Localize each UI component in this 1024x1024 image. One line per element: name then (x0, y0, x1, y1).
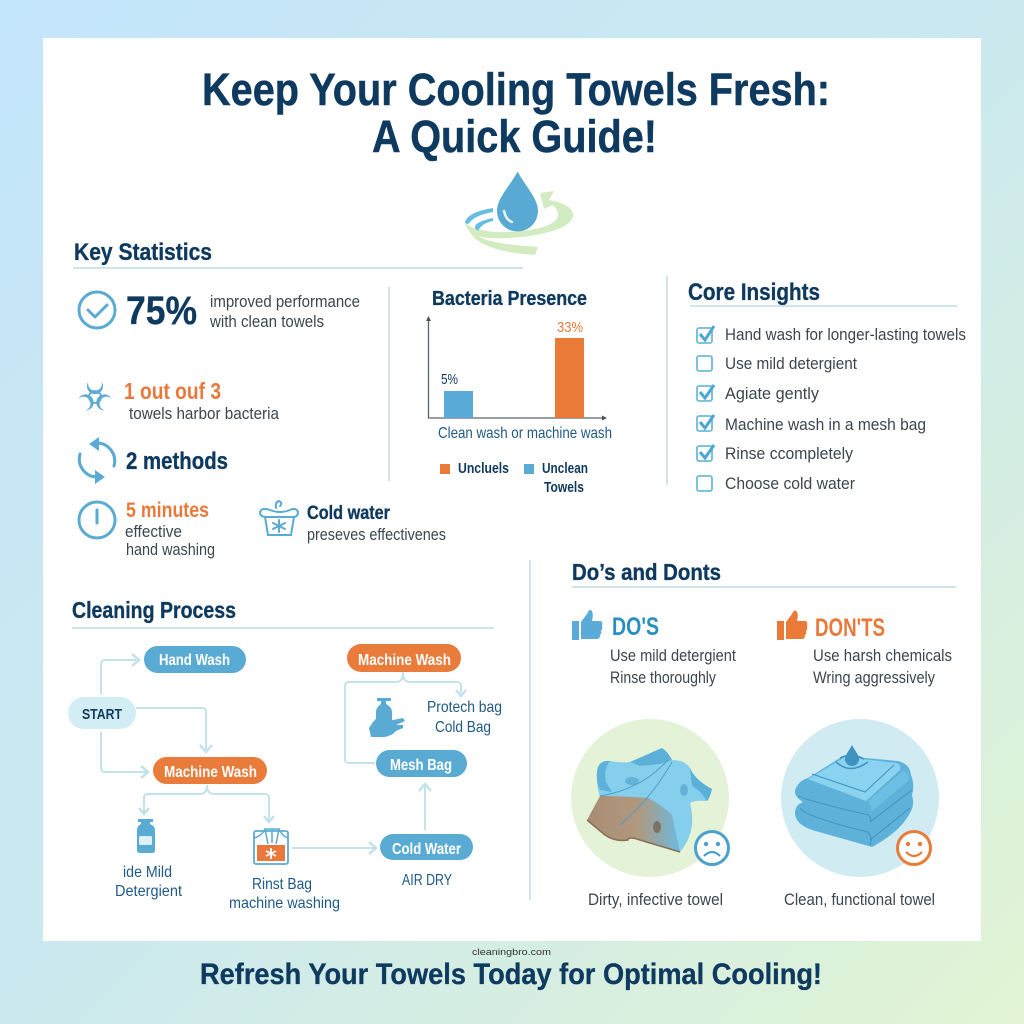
panel: don'ts: Wring aggressively (813, 668, 935, 687)
bar: unclean: 33% (557, 319, 583, 336)
icon: smiley face (898, 832, 930, 864)
panel: do's (572, 610, 736, 687)
stat: cold water: Cold water (307, 503, 391, 524)
stat: cold water: preseves effectivenes (307, 526, 446, 544)
stat: 75 percent: 75% (126, 289, 197, 333)
text: protect bag cold bag: Protech bag (427, 699, 502, 716)
checklist item: Agiate gently (725, 384, 819, 403)
stat: 75 percent (79, 289, 360, 333)
node: hand wash: Hand Wash (159, 652, 230, 669)
title: Keep Your Cooling Towels Fresh: (202, 64, 830, 115)
node: cold water: Cold Water (392, 841, 461, 858)
panel: do's: Rinse thoroughly (610, 668, 716, 687)
footer tagline: Refresh Your Towels Today for Optimal Cooling! (200, 958, 822, 991)
stat: 5 minutes (79, 499, 215, 559)
stat: 2 methods: 2 methods (126, 448, 228, 475)
illustration: clean towel: Clean, functional towel (784, 890, 935, 909)
checklist item: Use mild detergient (725, 354, 857, 373)
legend (440, 460, 588, 496)
text: mild detergent: Detergient (115, 883, 182, 900)
bar chart: bacteria presence (426, 288, 612, 496)
stat: 5 minutes: 5 minutes (126, 499, 209, 522)
node: cold water (380, 834, 473, 860)
heading: cleaning process: Cleaning Process (72, 597, 236, 623)
connector: start to machine wash (101, 732, 148, 778)
checklist item: Machine wash in a mesh bag (725, 415, 926, 434)
node: machine wash lower (153, 757, 267, 784)
connector: start to machine wash right (136, 708, 212, 752)
bar chart: bacteria presence: Bacteria Presence (432, 288, 587, 310)
stat: 1 out of 3: 1 out ouf 3 (124, 378, 221, 404)
connector: mesh bag loop (345, 673, 466, 763)
text: protect bag cold bag (427, 699, 502, 736)
connector: rinse bag to cold water (292, 842, 376, 854)
icon: soap and hand (369, 698, 405, 737)
stat: 1 out of 3 (78, 378, 279, 423)
legend: Uncluels (458, 460, 509, 477)
title: A Quick Guide! (372, 111, 657, 162)
icon: water drop with swirl (465, 172, 573, 255)
legend: Towels (544, 479, 584, 496)
icon: sad face (696, 832, 728, 864)
icon: detergent bottle (137, 819, 155, 853)
illustration: clean towel (781, 719, 939, 909)
stat: 75 percent: improved performance (210, 292, 360, 311)
panel: core insights: Core Insights (688, 279, 820, 306)
text: mild detergent (115, 864, 182, 900)
panel: don'ts: DON'TS (815, 614, 885, 642)
text: rinse bag (229, 876, 340, 912)
checklist item: Rinse ccompletely (725, 444, 853, 463)
stat: 1 out of 3: towels harbor bacteria (129, 404, 279, 423)
text: air dry: AIR DRY (402, 872, 452, 889)
checklist item: Choose cold water (725, 474, 855, 493)
node: machine wash lower: Machine Wash (164, 764, 257, 781)
panel: do's: Use mild detergient (610, 646, 736, 665)
heading: do's and don'ts: Do’s and Donts (572, 559, 721, 585)
legend: Unclean (542, 460, 588, 477)
illustration: dirty towel (571, 719, 729, 909)
node: start (68, 697, 136, 729)
bar: unclean (555, 319, 584, 418)
illustration: dirty towel: Dirty, infective towel (588, 890, 723, 909)
text: rinse bag: machine washing (229, 895, 340, 912)
bar: clean: 5% (441, 371, 458, 388)
panel: don'ts: Use harsh chemicals (813, 646, 952, 665)
stat: 5 minutes: hand washing (126, 540, 215, 559)
stat: 75 percent: with clean towels (209, 312, 324, 331)
stat: 5 minutes: effective (125, 522, 182, 541)
node: mesh bag: Mesh Bag (390, 757, 452, 774)
node: machine wash upper: Machine Wash (358, 652, 451, 669)
node: start: START (82, 706, 122, 723)
text: mild detergent: ide Mild (123, 864, 172, 881)
heading: key statistics: Key Statistics (74, 239, 212, 266)
panel: don'ts (777, 610, 952, 687)
axis label: Clean wash or machine wash (438, 425, 612, 442)
connector: start to hand wash (101, 654, 139, 694)
node: mesh bag (376, 750, 467, 777)
bar: clean (441, 371, 473, 418)
connector: machine wash fork (139, 785, 274, 822)
stat: cold water (260, 501, 446, 544)
icon: rinse bag (254, 829, 288, 864)
flowchart: cleaning process (68, 644, 502, 912)
source credit: cleaningbro.com (472, 947, 551, 958)
text: rinse bag: Rinst Bag (252, 876, 312, 893)
icon: thumbs up orange (777, 610, 807, 640)
connector: cold water to mesh bag (419, 784, 431, 830)
panel: core insights (688, 279, 966, 493)
title (202, 64, 830, 162)
panel: do's: DO'S (612, 613, 659, 641)
icon: thumbs up blue (572, 610, 602, 640)
node: machine wash upper (347, 644, 461, 672)
stat: 2 methods (79, 437, 228, 484)
node: hand wash (144, 646, 246, 673)
checklist item: Hand wash for longer-lasting towels (725, 325, 966, 344)
text: protect bag cold bag: Cold Bag (435, 719, 491, 736)
